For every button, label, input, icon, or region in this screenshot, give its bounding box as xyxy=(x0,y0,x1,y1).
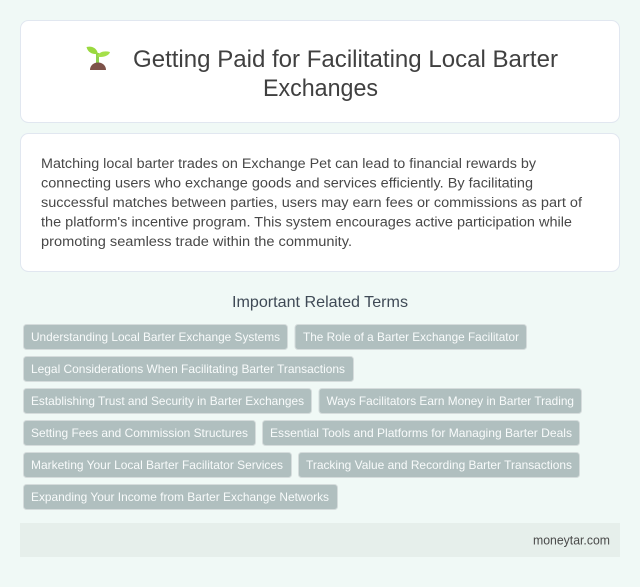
tag xyxy=(24,324,288,350)
tag: Legal Considerations When Facilitating Barter Transactions xyxy=(31,362,345,376)
tag xyxy=(24,388,312,414)
text block: description: Matching local barter trades on Exchange Pet can lead to financial rewards by xyxy=(41,156,537,172)
title: Exchanges xyxy=(263,75,378,102)
tag list xyxy=(24,324,582,510)
tag: Understanding Local Barter Exchange Systems xyxy=(31,330,280,344)
tag xyxy=(295,324,526,350)
footer bar xyxy=(20,523,620,557)
text block: description: successful matches between parties, users may earn fees or commissions as part of xyxy=(41,195,582,211)
tag: Marketing Your Local Barter Facilitator Services xyxy=(31,458,283,472)
tag: Setting Fees and Commission Structures xyxy=(31,426,248,440)
text block: description xyxy=(41,156,582,250)
tag xyxy=(24,420,256,446)
tag: Establishing Trust and Security in Barter Exchanges xyxy=(31,394,304,408)
text block: description: promoting seamless trade within the community. xyxy=(41,234,352,250)
icon: sprout xyxy=(86,47,110,70)
tag xyxy=(24,484,338,510)
panel: description card xyxy=(20,134,620,272)
tag: Essential Tools and Platforms for Managing Barter Deals xyxy=(270,426,572,440)
tag: Tracking Value and Recording Barter Transactions xyxy=(306,458,572,472)
title: Getting Paid for Facilitating Local Barter xyxy=(133,46,558,73)
text block: description: connecting users who exchange goods and services efficiently. By facilitating xyxy=(41,176,533,192)
tag: The Role of a Barter Exchange Facilitator xyxy=(303,330,519,344)
tag xyxy=(24,356,354,382)
footer credit: moneytar.com xyxy=(533,534,610,548)
text block: description: the platform's incentive program. This system encourages active participation while xyxy=(41,214,572,230)
tag xyxy=(319,388,582,414)
tag xyxy=(24,452,292,478)
heading: important related terms: Important Related Terms xyxy=(232,294,408,311)
title xyxy=(133,46,558,102)
tag: Expanding Your Income from Barter Exchange Networks xyxy=(31,490,329,504)
panel: title card xyxy=(20,20,620,122)
tag xyxy=(298,452,580,478)
tag: Ways Facilitators Earn Money in Barter Trading xyxy=(326,394,574,408)
tag xyxy=(262,420,580,446)
